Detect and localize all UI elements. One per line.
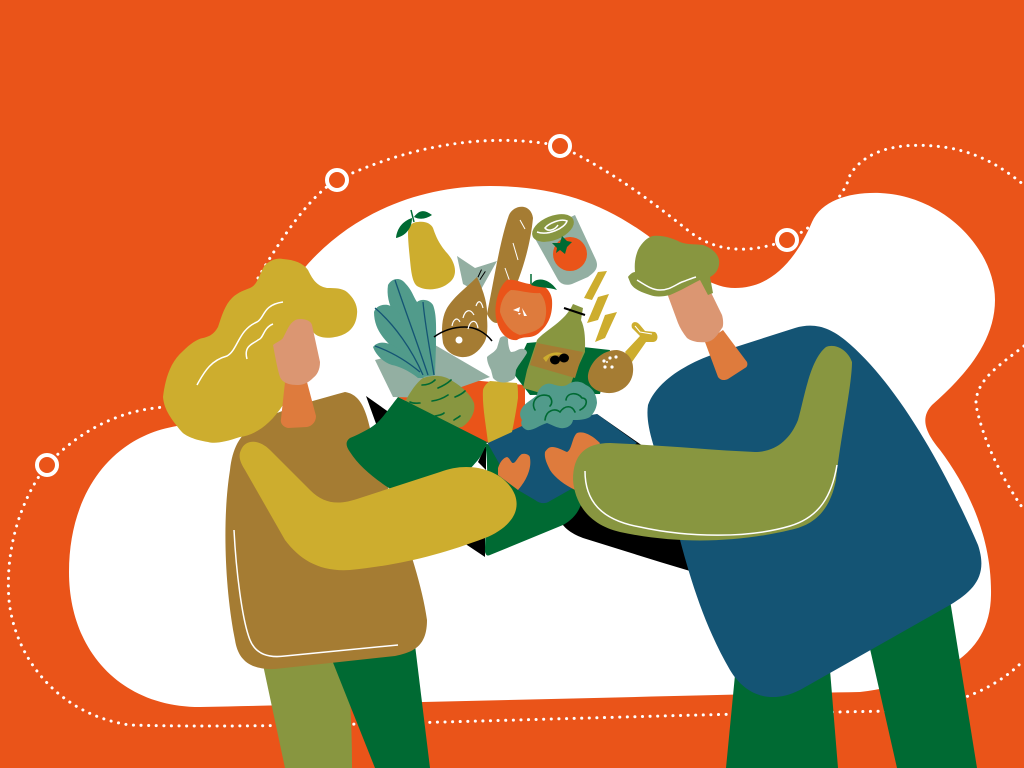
chicken drumstick: [588, 322, 657, 393]
arm highlight: [585, 465, 837, 535]
person right: body: [545, 236, 981, 697]
pasta: [584, 271, 617, 342]
oil bottle: [523, 304, 585, 400]
dotted path: [8, 140, 1024, 726]
person left: body: [163, 259, 530, 669]
face: [273, 319, 320, 385]
arm: [240, 442, 517, 570]
person right: legs: [726, 600, 977, 768]
broccoli: [520, 382, 597, 430]
cap highlight: [637, 277, 696, 290]
box back and black shadow: [366, 380, 720, 574]
hair: [163, 259, 357, 443]
neck: [281, 382, 316, 428]
hair highlights: [197, 302, 283, 385]
path node markers: [37, 136, 797, 475]
tomato can: [528, 209, 597, 285]
hand left: [498, 454, 530, 490]
fish tail: [457, 256, 497, 293]
face: [664, 270, 723, 342]
neck: [705, 330, 747, 380]
torso highlight: [234, 530, 398, 657]
sage paper: [375, 345, 490, 398]
arm: [573, 346, 852, 540]
pear: [396, 210, 455, 289]
green pack behind bottle: [513, 342, 610, 395]
baguette: [487, 207, 533, 323]
white cloud shape: [69, 186, 995, 707]
person left: legs: [262, 645, 430, 768]
greens leaves: [373, 279, 436, 378]
torso: [647, 326, 981, 697]
mustard jar: [483, 381, 518, 443]
fish body: [434, 277, 492, 357]
food group: [373, 207, 657, 443]
box flap: [347, 397, 487, 499]
apple: [495, 274, 557, 340]
hand right: [545, 432, 600, 490]
torso: [225, 392, 427, 669]
mushroom: [487, 336, 527, 382]
cap: [628, 236, 719, 296]
beet: [400, 376, 474, 430]
